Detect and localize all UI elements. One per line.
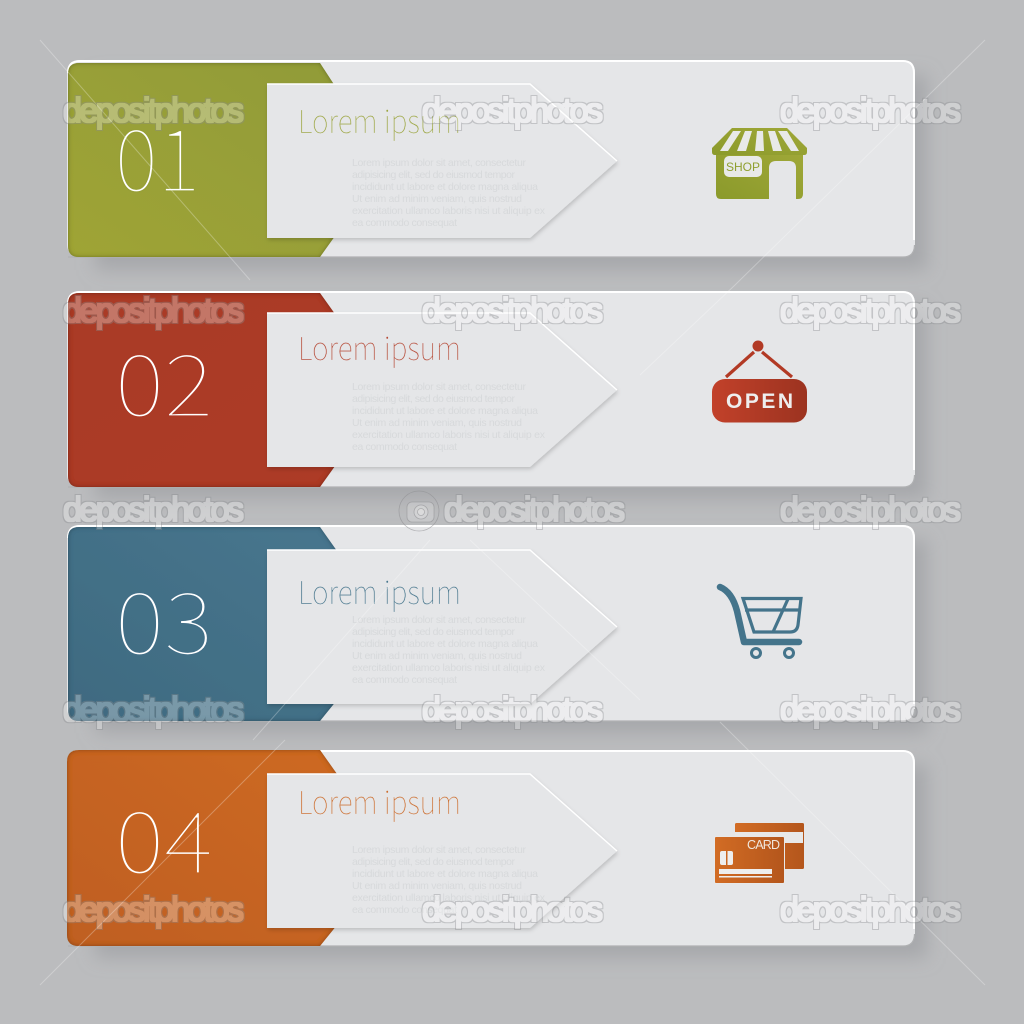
watermark: depositphotos text: depositphotos [63, 491, 244, 529]
body text: Ut enim ad minim veniam, quis nostrud [352, 193, 522, 205]
number: 03 [115, 554, 213, 679]
card base [67, 525, 915, 721]
arrow panel [267, 550, 617, 704]
watermark: depositphotos text: depositphotos [422, 691, 603, 729]
watermark: depositphotos text: depositphotos [780, 292, 961, 330]
icon: shopping cart [720, 587, 801, 658]
panel: card shadows [95, 75, 927, 958]
icon: credit cards [714, 823, 804, 884]
body text: ea commodo consequat [352, 441, 457, 453]
panel: step 01 [67, 60, 915, 257]
colored tab [67, 750, 337, 946]
watermark: depositphotos text: depositphotos [780, 891, 961, 929]
body text: incididunt ut labore et dolore magna aliqua [352, 868, 538, 880]
watermark: depositphotos text: depositphotos [444, 491, 625, 529]
body text: Lorem ipsum dolor sit amet, consectetur [352, 381, 526, 393]
number: 02 [115, 316, 213, 441]
body text: incididunt ut labore et dolore magna aliqua [352, 405, 538, 417]
watermark: depositphotos text: depositphotos [780, 691, 961, 729]
card base [67, 750, 915, 946]
arrow panel [267, 774, 617, 928]
colored tab [68, 63, 335, 257]
body text: Lorem ipsum dolor sit amet, consectetur [352, 157, 526, 169]
watermark: depositphotos text: depositphotos [422, 92, 603, 130]
card base [67, 291, 915, 487]
body text: exercitation ullamco laboris nisi ut aliquip ex [352, 662, 546, 674]
card base [67, 60, 915, 257]
icon: shop: SHOP [726, 160, 760, 174]
arrow panel [267, 84, 617, 238]
body text: adipisicing elit, sed do eiusmod tempor [352, 393, 516, 405]
body text: exercitation ullamco laboris nisi ut aliquip ex [352, 429, 546, 441]
watermark: depositphotos text: depositphotos [422, 292, 603, 330]
arrow panel [267, 313, 617, 467]
watermark: depositphotos text: depositphotos [63, 92, 244, 130]
body text: incididunt ut labore et dolore magna aliqua [352, 638, 538, 650]
watermark: depositphotos text: depositphotos [422, 891, 603, 929]
body text [352, 157, 546, 229]
panel: step 03 [67, 525, 915, 721]
panel: step 04 [67, 750, 915, 946]
heading: Lorem ipsum [298, 568, 461, 614]
watermark: depositphotos text [63, 92, 961, 929]
icon: open sign [712, 340, 807, 422]
heading: Lorem ipsum [298, 778, 461, 824]
body text: adipisicing elit, sed do eiusmod tempor [352, 856, 516, 868]
panel: step 02 [67, 291, 915, 487]
heading: Lorem ipsum [298, 324, 461, 370]
body text: Ut enim ad minim veniam, quis nostrud [352, 880, 522, 892]
body text: ea commodo consequat [352, 674, 457, 686]
body text: exercitation ullamco laboris nisi ut aliquip ex [352, 892, 546, 904]
watermark: depositphotos text: depositphotos [780, 92, 961, 130]
heading: Lorem ipsum [298, 97, 461, 143]
body text [352, 844, 546, 916]
colored tab [68, 293, 335, 487]
body text: ea commodo consequat [352, 217, 457, 229]
watermark: depositphotos text: depositphotos [63, 891, 244, 929]
watermark: depositphotos text: depositphotos [63, 292, 244, 330]
body text: Ut enim ad minim veniam, quis nostrud [352, 417, 522, 429]
body text: Lorem ipsum dolor sit amet, consectetur [352, 844, 526, 856]
body text: adipisicing elit, sed do eiusmod tempor [352, 169, 516, 181]
watermark: depositphotos text: depositphotos [63, 691, 244, 729]
body text: ea commodo consequat [352, 904, 457, 916]
colored tab [68, 527, 337, 721]
body text: adipisicing elit, sed do eiusmod tempor [352, 626, 516, 638]
body text: exercitation ullamco laboris nisi ut aliquip ex [352, 205, 546, 217]
body text: Ut enim ad minim veniam, quis nostrud [352, 650, 522, 662]
watermark: depositphotos text: depositphotos [780, 491, 961, 529]
number: 01 [115, 91, 200, 216]
icon: open sign: OPEN [726, 390, 793, 413]
body text [352, 381, 546, 453]
body text [352, 614, 546, 686]
watermark: camera logo [399, 491, 439, 531]
icon: shop [712, 128, 807, 199]
body text: Lorem ipsum dolor sit amet, consectetur [352, 614, 526, 626]
number: 04 [115, 773, 213, 898]
body text: incididunt ut labore et dolore magna aliqua [352, 181, 538, 193]
icon: credit cards: CARD [747, 838, 780, 852]
